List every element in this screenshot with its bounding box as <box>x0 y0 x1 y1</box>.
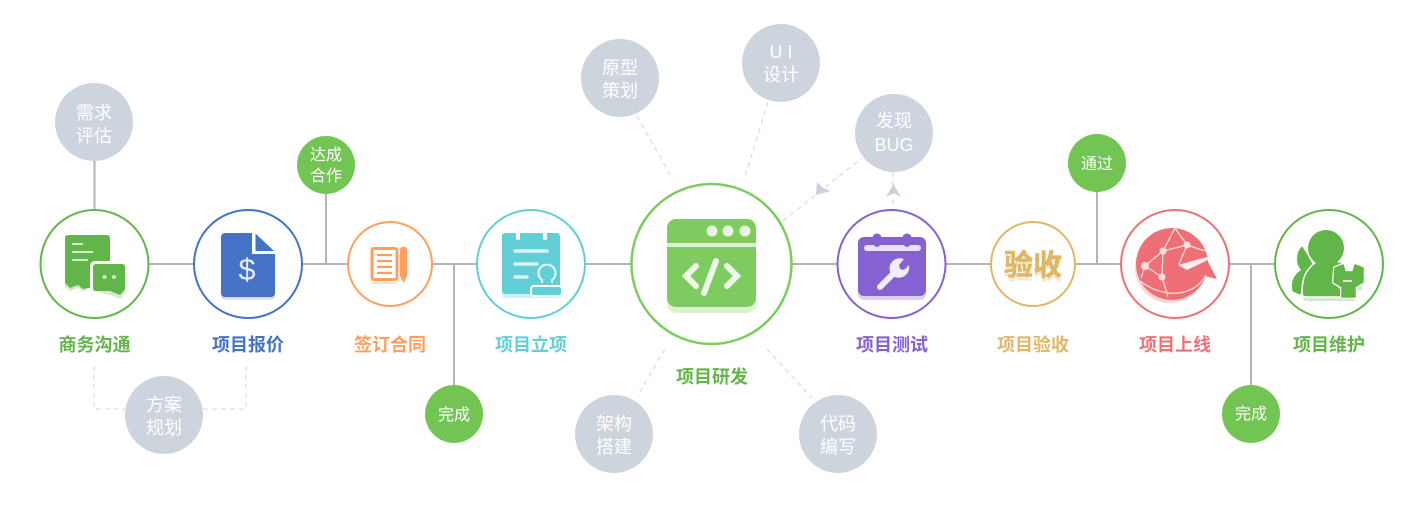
bubble: 架构搭建: 架构 <box>596 414 632 434</box>
label: 项目验收 <box>997 334 1069 355</box>
arrow: from bug bubble toward development <box>816 182 831 195</box>
bubble: 代码编写 <box>799 395 877 473</box>
icon: globe with arrow <box>1135 228 1217 303</box>
icon: contract and pencil <box>372 246 407 283</box>
bubble: 架构搭建: 搭建 <box>596 437 632 457</box>
bubble: 代码编写: 编写 <box>820 437 856 457</box>
bubble: 完成 left: 完成 <box>438 406 470 424</box>
bubble: 需求评估: 评估 <box>76 126 112 146</box>
step: 项目研发 <box>632 184 792 387</box>
label: 项目上线 <box>1139 335 1211 355</box>
step: 商务沟通 <box>40 210 148 355</box>
bubble: 发现BUG <box>855 94 933 172</box>
bubble: 方案规划: 方案 <box>146 395 182 415</box>
main connector line <box>94 160 1329 390</box>
step: 项目测试 <box>838 210 946 355</box>
icon: 验收 glyphs: 验收 <box>1004 249 1062 282</box>
bubble: 达成合作: 合作 <box>310 167 342 185</box>
bubble: 通过 <box>1068 134 1126 192</box>
label: 项目立项 <box>495 334 567 355</box>
dollar sign: $ <box>238 252 256 287</box>
dashed connectors <box>94 102 893 409</box>
step: 项目立项 <box>477 210 585 355</box>
bubble: 原型策划 <box>581 39 659 117</box>
bubble: UI设计: U I <box>769 42 793 62</box>
step: 签订合同 <box>348 222 432 355</box>
bubble: 发现BUG: BUG <box>874 135 914 155</box>
icon: code window <box>667 219 756 313</box>
step: 项目上线 <box>1121 210 1229 355</box>
bubble: 方案规划: 规划 <box>146 418 182 438</box>
bubble: 完成 right: 完成 <box>1235 405 1267 423</box>
label: 项目研发 <box>676 366 748 387</box>
bubble: 完成 left <box>425 385 483 443</box>
label: 项目测试 <box>856 335 928 355</box>
bubble: 需求评估 <box>55 83 133 161</box>
bubble: UI设计: 设计 <box>763 65 799 85</box>
step: 项目验收 <box>991 222 1075 355</box>
bubble: 达成合作 <box>297 136 355 194</box>
icon: quote document <box>221 233 275 300</box>
label: 项目报价 <box>212 335 284 355</box>
icon: approval sheet with stamp <box>502 233 562 298</box>
bubble: UI设计 <box>742 24 820 102</box>
bubble: 代码编写: 代码 <box>820 414 856 434</box>
bubble: 原型策划: 原型 <box>602 58 638 78</box>
bubble: 方案规划 <box>125 376 203 454</box>
label: 商务沟通 <box>58 335 130 355</box>
label: 签订合同 <box>354 334 426 355</box>
step: 项目报价 <box>194 210 302 355</box>
bubble: 发现BUG: 发现 <box>876 111 912 131</box>
bubble: 架构搭建 <box>575 395 653 473</box>
icon: document and chat <box>65 235 128 299</box>
bubble: 原型策划: 策划 <box>602 81 638 101</box>
bubble: 需求评估: 需求 <box>76 103 112 123</box>
bubble: 通过: 通过 <box>1081 155 1113 173</box>
icon: calendar and wrench <box>858 234 926 300</box>
bubble: 达成合作: 达成 <box>310 146 342 164</box>
icon: 验收 glyphs: 验收 <box>1004 253 1062 286</box>
step: 项目维护 <box>1275 210 1383 355</box>
bubble: 完成 right <box>1222 385 1280 443</box>
arrow: up to bug bubble <box>886 184 901 197</box>
label: 项目维护 <box>1293 335 1365 355</box>
icon: person with wrench <box>1292 229 1363 301</box>
